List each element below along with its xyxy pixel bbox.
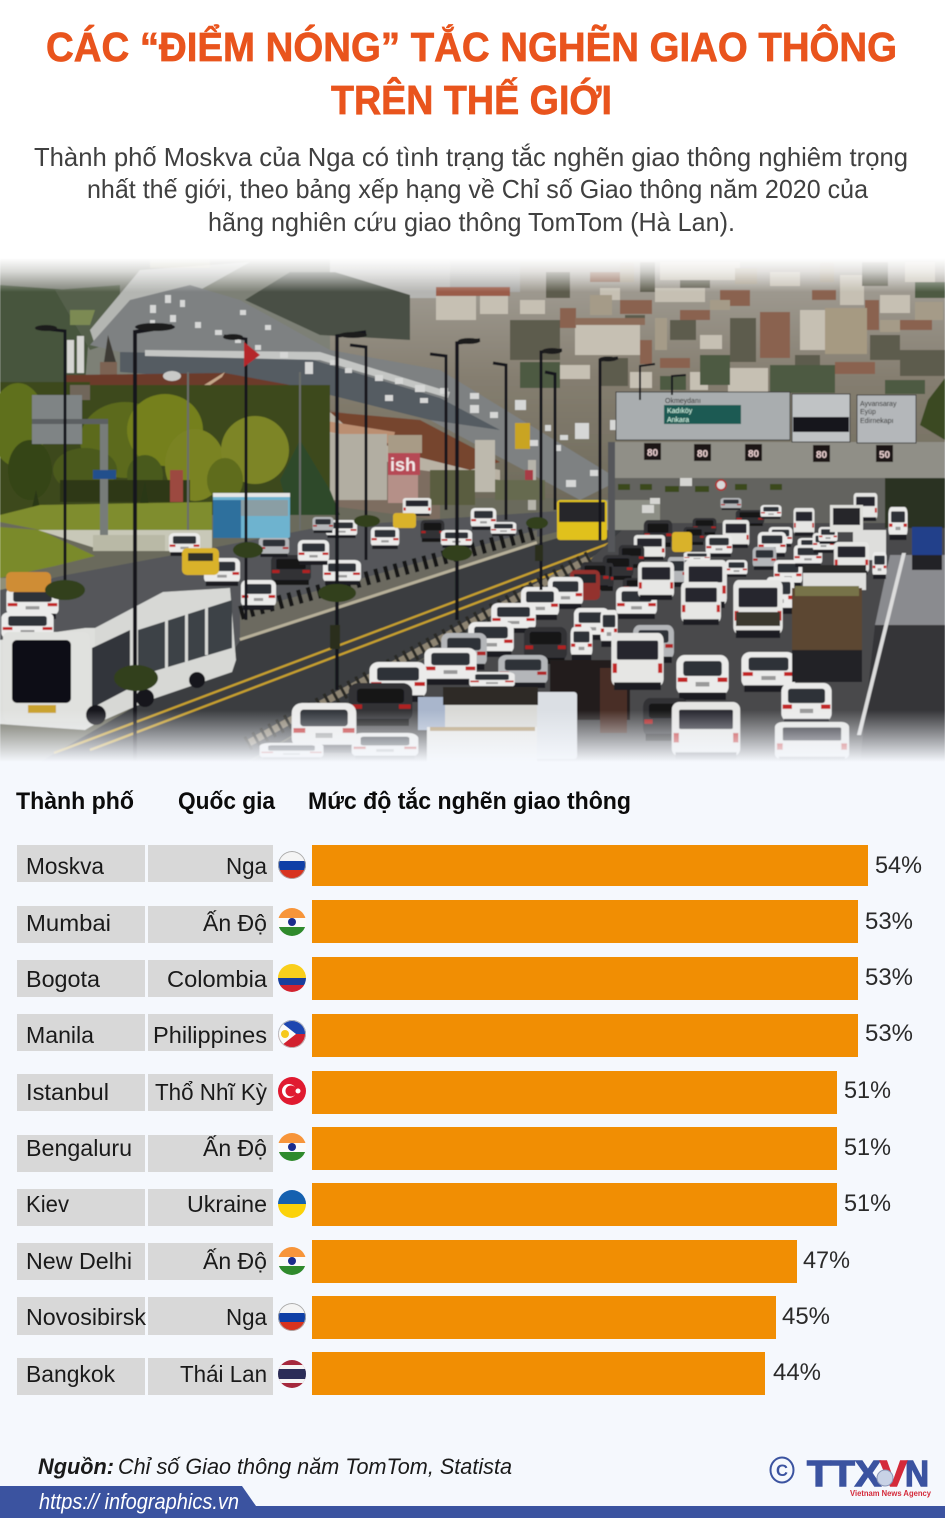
- buildings along road: [329, 410, 546, 520]
- row: Manila: Philippines: [153, 1022, 267, 1048]
- row: Mumbai: [17, 900, 913, 943]
- row: Moskva: Nga: [226, 853, 268, 879]
- row: New Delhi: 47%: [803, 1247, 850, 1274]
- articulated white bus: [0, 588, 236, 730]
- title: [46, 23, 897, 123]
- gantry and signs: 50: [879, 450, 891, 461]
- gantry and signs: Okmeydanı: [665, 398, 701, 405]
- column headings: [16, 787, 631, 815]
- row: Bengaluru: Bengaluru: [26, 1135, 132, 1161]
- row: Novosibirsk: Novosibirsk: [26, 1304, 146, 1330]
- row: Moskva: [17, 845, 922, 886]
- row: Manila: 53%: [865, 1020, 913, 1047]
- right barrier: [247, 558, 590, 744]
- title: TRÊN THẾ GIỚI: [331, 77, 612, 123]
- gantry and signs: [608, 378, 945, 552]
- barrier zone and curb: [240, 530, 537, 617]
- row: Bogota: 53%: [865, 964, 913, 991]
- gantry and signs: Ayvansaray: [860, 401, 897, 408]
- row: Bangkok: [17, 1352, 821, 1395]
- intro text: nhất thế giới, theo bảng xếp hạng về Chỉ số Giao thông năm 2020 của: [87, 174, 869, 204]
- logo: TTXVN: V: [880, 1453, 907, 1494]
- photo: congested highway: [0, 258, 945, 762]
- row: Manila: Manila: [26, 1022, 95, 1048]
- column headings: Mức độ tắc nghẽn giao thông: [308, 787, 631, 815]
- column headings: Thành phố: [16, 788, 134, 815]
- row: Novosibirsk: Nga: [226, 1304, 268, 1330]
- column headings: Quốc gia: [178, 788, 276, 815]
- row: Bengaluru: Ấn Độ: [203, 1134, 267, 1161]
- row: Mumbai: Mumbai: [26, 910, 111, 936]
- gantry and signs: Kadıköy: [667, 408, 693, 415]
- right carriageway: [284, 522, 945, 749]
- row: Istanbul: [17, 1071, 891, 1114]
- photo top fade: [0, 258, 945, 292]
- gantry and signs: 80: [647, 448, 659, 459]
- gantry and signs: Eyüp: [860, 409, 876, 416]
- gantry and signs: 80: [697, 449, 709, 460]
- intro text: hãng nghiên cứu giao thông TomTom (Hà Lan).: [208, 207, 735, 237]
- row: Bangkok: 44%: [773, 1359, 821, 1386]
- logo: TTXVN: C: [776, 1461, 788, 1480]
- row: Istanbul: 51%: [844, 1077, 891, 1104]
- logo: TTXVN: N: [905, 1453, 929, 1494]
- left road cars: [1, 498, 516, 642]
- road chevron posts: [330, 545, 543, 649]
- footer band: https:// infographics.vn: [39, 1489, 239, 1514]
- gantry and signs: Edirnekapı: [860, 418, 894, 425]
- left carriageway: [0, 511, 557, 647]
- lamp heads: [35, 323, 617, 362]
- yellow bus: [557, 500, 607, 540]
- flag: [244, 342, 260, 367]
- gantry and signs: 80: [816, 450, 828, 461]
- row: Kiev: Ukraine: [187, 1191, 267, 1217]
- lamp posts: [36, 326, 686, 762]
- row: New Delhi: New Delhi: [26, 1248, 132, 1274]
- left barrier: [240, 532, 537, 613]
- row: Manila: [17, 1014, 913, 1057]
- row: Bogota: [17, 957, 913, 1000]
- row: New Delhi: Ấn Độ: [203, 1247, 267, 1274]
- left hills and haze: [0, 264, 330, 376]
- source note: Chỉ số Giao thông năm TomTom, Statista: [118, 1454, 512, 1479]
- grass and paths: [0, 502, 212, 590]
- source note: Nguồn:: [38, 1454, 114, 1479]
- row: Bengaluru: [17, 1127, 891, 1172]
- footer band: [0, 1486, 945, 1518]
- logo: TTXVN: [770, 1453, 931, 1498]
- blue city bus: [213, 493, 290, 538]
- row: Kiev: [17, 1183, 891, 1226]
- header background: [0, 0, 945, 258]
- minarets and spire: [67, 335, 117, 376]
- logo: TTXVN: TTX: [807, 1453, 881, 1494]
- planters: [45, 515, 548, 691]
- near traffic: [260, 560, 866, 762]
- row: Mumbai: 53%: [865, 908, 913, 935]
- row: Moskva: 54%: [875, 852, 922, 879]
- yellow bus lane lines: [54, 543, 610, 753]
- row: Bengaluru: 51%: [844, 1134, 891, 1161]
- street sign on pole: [32, 395, 183, 535]
- under-gantry distance: [600, 478, 945, 530]
- row: Novosibirsk: [17, 1296, 830, 1339]
- photo bottom fade: [0, 710, 945, 762]
- row: Novosibirsk: 45%: [782, 1303, 830, 1330]
- far highway: [90, 260, 620, 500]
- city hillside: [330, 262, 945, 478]
- buildings along road: ish: [390, 455, 416, 475]
- row: Mumbai: Ấn Độ: [203, 909, 267, 936]
- intro text: [34, 142, 908, 237]
- row: Istanbul: Thổ Nhĩ Kỳ: [155, 1079, 267, 1105]
- row: Bangkok: Thái Lan: [180, 1361, 267, 1387]
- row: Bogota: Colombia: [167, 966, 268, 992]
- logo: TTXVN: Vietnam News Agency: [850, 1488, 931, 1498]
- row: New Delhi: [17, 1240, 850, 1283]
- row: Bangkok: Bangkok: [26, 1361, 115, 1387]
- row: Kiev: 51%: [844, 1190, 891, 1217]
- trees: [0, 382, 340, 525]
- central carriageway: [61, 530, 622, 753]
- row: Kiev: Kiev: [26, 1191, 69, 1217]
- row: Istanbul: Istanbul: [26, 1079, 109, 1105]
- dense far traffic: [600, 493, 942, 614]
- gantry and signs: Ankara: [667, 417, 689, 424]
- row: Bogota: Bogota: [26, 966, 101, 992]
- title: CÁC “ĐIỂM NÓNG” TẮC NGHẼN GIAO THÔNG: [46, 23, 897, 70]
- intro text: Thành phố Moskva của Nga có tình trạng tắc nghẽn giao thông nghiêm trọng: [34, 142, 908, 172]
- row: Moskva: Moskva: [26, 853, 105, 879]
- red roofs: [66, 372, 289, 386]
- gantry and signs: 80: [748, 449, 760, 460]
